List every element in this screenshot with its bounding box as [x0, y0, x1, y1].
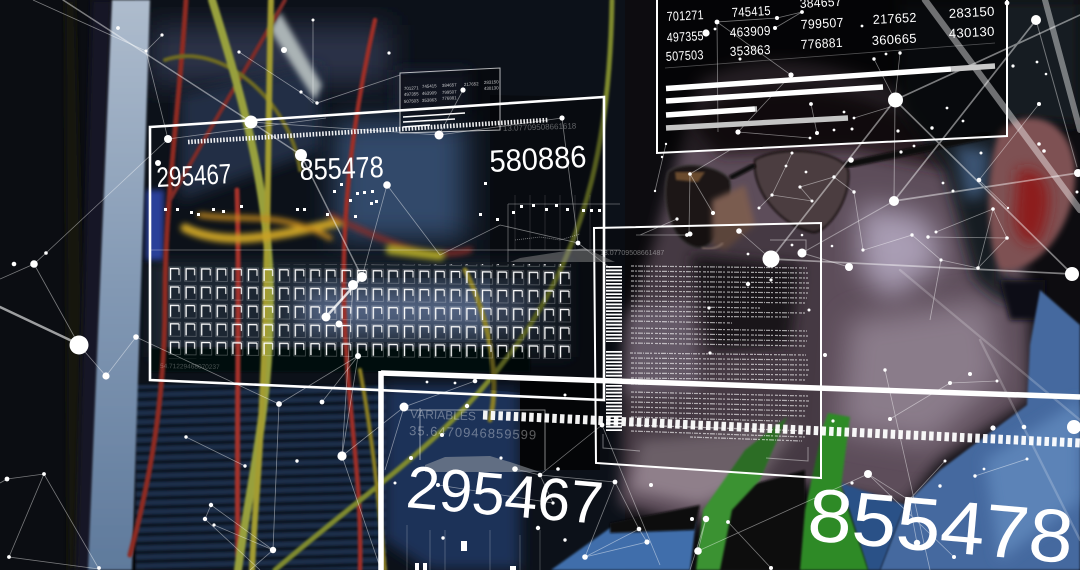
- small panel mini table: 463909: [422, 90, 437, 96]
- number: 855478 small: 855478: [299, 151, 384, 187]
- data table: top right panel numbers: 283150: [948, 4, 995, 21]
- area chart: bottom panel: [425, 456, 540, 472]
- number: 295467 large: 295467: [404, 453, 606, 537]
- faint label: VARIABLES: 35.6470946859599: [409, 423, 537, 442]
- text block: central panel fine print: [630, 266, 809, 441]
- faint label: VARIABLES: VARIABLES: [410, 407, 476, 423]
- data table: top right panel numbers: 463909: [729, 23, 771, 40]
- dotted progress strip: main panel: [188, 120, 548, 142]
- frame: central text panel: [594, 223, 821, 478]
- data table: top right panel numbers: 507503: [665, 47, 704, 64]
- striped barcode: central panel: [606, 266, 622, 432]
- progress bars: top right panel: [666, 66, 995, 128]
- frame: main rack panel: [150, 97, 604, 400]
- small panel mini table: 217652: [464, 81, 479, 87]
- small panel mini table: 507503: [404, 98, 419, 104]
- shirt: [880, 290, 1080, 570]
- frame: small top centre panel: [400, 68, 500, 133]
- frame: bottom panel: [381, 371, 1080, 570]
- faint data string: main panel: 13.07709508661618: [503, 121, 577, 133]
- data table: top right panel numbers: 430130: [948, 24, 995, 41]
- small panel mini table: 430130: [484, 85, 499, 91]
- data table: top right panel numbers: 799507: [800, 15, 844, 32]
- green safety vest: [696, 417, 787, 570]
- orange patch cords: [185, 215, 470, 256]
- small panel mini table: 497355: [404, 91, 419, 97]
- divider: table rule: [665, 43, 995, 68]
- scatter chart: main panel: [164, 182, 620, 262]
- small panel mini table: 701271: [404, 85, 419, 91]
- faint data string: main panel lower left: 54.71229468070237: [160, 363, 220, 371]
- dark collar shadow: [610, 505, 700, 533]
- small panel mini table: 283150: [484, 79, 499, 85]
- data table: top right panel numbers: 745415: [731, 3, 771, 20]
- divider rule: main panel: [150, 249, 604, 251]
- number: 580886: 580886: [489, 139, 587, 179]
- silver pillar: [88, 0, 150, 570]
- small panel mini table: 353863: [422, 97, 437, 103]
- small panel mini table: 745415: [422, 83, 437, 89]
- ear: [989, 118, 1075, 270]
- small panel mini table: 776881: [442, 95, 457, 101]
- cables: [130, 0, 612, 570]
- eyeglasses: [665, 135, 990, 250]
- bar stubs: bottom panel: [407, 525, 540, 570]
- small panel mini table: 384657: [442, 82, 457, 88]
- data table: top right panel numbers: 360665: [871, 31, 917, 48]
- rack interior: [135, 0, 625, 570]
- data table: top right panel numbers: 217652: [872, 10, 917, 27]
- frame: top right panel: [657, 0, 1007, 153]
- dotted progress strip: bottom panel: [483, 415, 1080, 443]
- faint data string: central panel: 13.07709508661487: [600, 250, 664, 257]
- bracket cell grid: main panel: [168, 264, 573, 359]
- hair: [900, 0, 1080, 300]
- small panel bars: [403, 113, 465, 127]
- technician face: [551, 0, 1080, 570]
- darkened panel glass: [400, 0, 1007, 478]
- data table: top right panel numbers: 353863: [729, 42, 771, 59]
- frame: small variables panel: [403, 408, 545, 470]
- small panel mini table: [404, 79, 499, 104]
- data table: top right panel numbers: [665, 0, 995, 64]
- data table: top right panel numbers: 776881: [800, 35, 843, 52]
- dark left cabinet: [0, 0, 112, 570]
- data table: top right panel numbers: 701271: [666, 7, 704, 24]
- faint label: VARIABLES: [409, 407, 537, 442]
- number: 295467 small: 295467: [156, 158, 232, 193]
- small panel mini table: 799507: [442, 89, 457, 95]
- corner brackets: central panel: [603, 240, 808, 461]
- data table: top right panel numbers: 497355: [666, 28, 704, 45]
